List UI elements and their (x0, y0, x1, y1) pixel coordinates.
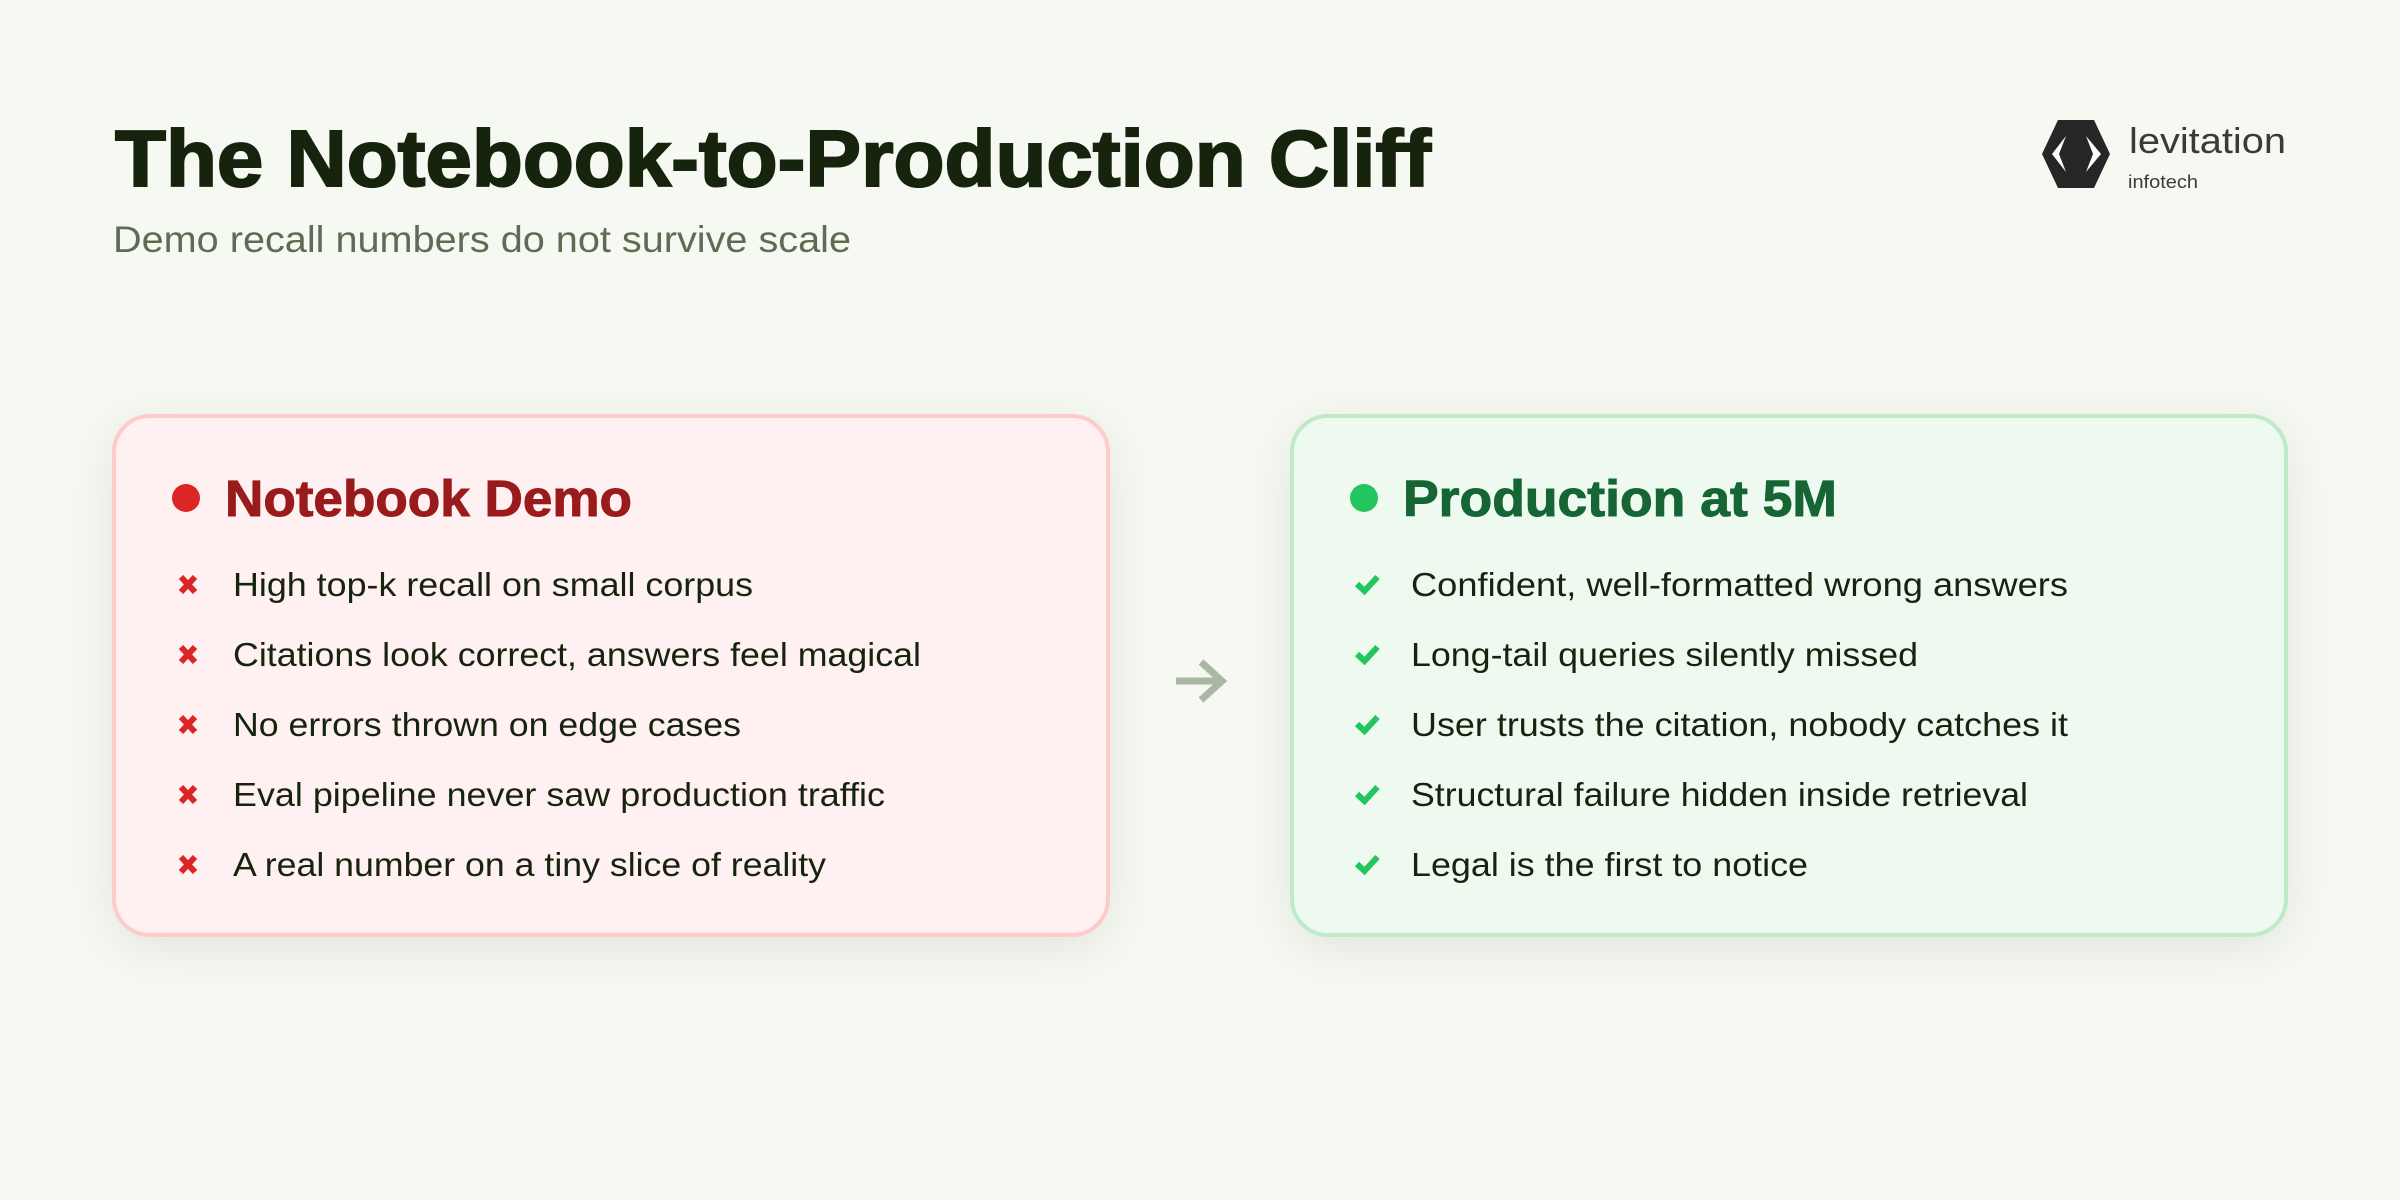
icon: hexagon logo mark (2042, 120, 2110, 188)
list item: Citations look correct, answers feel magical (233, 637, 921, 674)
list item: Structural failure hidden inside retrieval (1411, 777, 2028, 814)
icon: cross (181, 717, 195, 732)
list item: Eval pipeline never saw production traffic (233, 777, 885, 814)
icon: check (1357, 577, 1378, 591)
list item: Confident, well-formatted wrong answers (1411, 567, 2068, 604)
logo: levitation infotech (2042, 120, 2286, 192)
icon: cross (181, 857, 195, 872)
heading: production at 5M: Production at 5M (1403, 470, 1837, 527)
logo tagline: infotech (2128, 172, 2198, 192)
subtitle: Demo recall numbers do not survive scale (113, 219, 851, 260)
icon: cross (181, 787, 195, 802)
list item: Legal is the first to notice (1411, 847, 1808, 884)
list item: No errors thrown on edge cases (233, 707, 741, 744)
status dot: red (172, 484, 200, 512)
logo wordmark: levitation (2129, 120, 2286, 161)
list: production items (1357, 567, 2069, 884)
heading: notebook demo: Notebook Demo (225, 470, 632, 527)
icon: cross (181, 577, 195, 592)
list: demo items (181, 567, 921, 884)
panel: production at 5M (1292, 416, 2286, 935)
list item: A real number on a tiny slice of reality (233, 847, 826, 884)
status dot: green (1350, 484, 1378, 512)
panel: notebook demo (114, 416, 1108, 935)
icon: check (1357, 787, 1378, 801)
icon: check (1357, 647, 1378, 661)
arrow (1176, 662, 1222, 700)
list item: User trusts the citation, nobody catches it (1411, 707, 2069, 744)
list item: High top-k recall on small corpus (233, 567, 753, 604)
icon: check (1357, 857, 1378, 871)
icon: check (1357, 717, 1378, 731)
list item: Long-tail queries silently missed (1411, 637, 1918, 674)
icon: cross (181, 647, 195, 662)
title: The Notebook-to-Production Cliff (115, 114, 1431, 203)
